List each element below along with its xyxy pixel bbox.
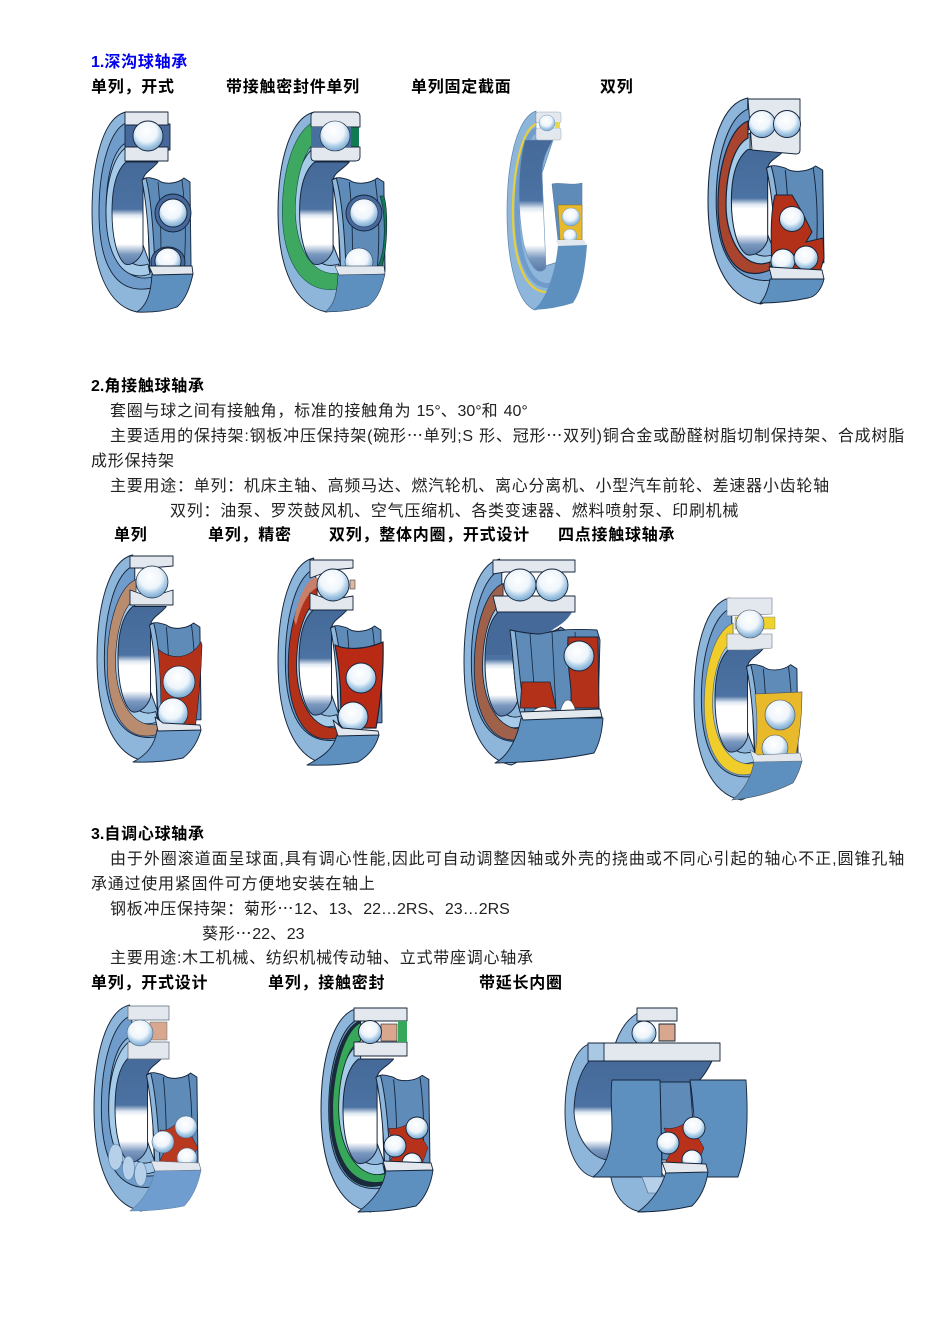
text block: section 2 description: 双列：油泵、罗茨鼓风机、空气压缩机、各类变速器、燃料喷射泵、印刷机械 [170,502,739,520]
text block: section 2 description [91,402,905,520]
text block: section 3 description: 主要用途:木工机械、纺织机械传动轴、立式带座调心轴承 [110,949,534,967]
icon: single row fixed section bearing [507,111,587,310]
subheading row: section 1 bearing types [91,77,633,96]
subheading row: section 3 bearing types: 单列，开式设计 [91,974,208,992]
title: section 2 angular contact ball bearings: 2.角接触球轴承 [91,376,205,395]
title: section 3 self-aligning ball bearings: 3.自调心球轴承 [91,824,205,843]
text block: section 3 description: 承通过使用紧固件可方便地安装在轴上 [91,875,376,893]
title: section 1 deep groove ball bearings: 1.深沟球轴承 [91,52,188,71]
icon: angular contact double row [464,559,603,765]
text block: section 2 description: 成形保持架 [91,452,175,470]
icon: single row open bearing [92,112,193,312]
text block: section 2 description: 主要用途：单列：机床主轴、高频马达、燃汽轮机、离心分离机、小型汽车前轮、差速器小齿轮轴 [110,477,830,495]
icon: self-aligning with extended inner ring [565,1008,747,1212]
subheading row: section 2 bearing types [114,525,675,544]
icon: four point contact bearing [694,598,802,800]
subheading row: section 1 bearing types: 带接触密封件单列 [226,77,360,96]
subheading row: section 1 bearing types: 单列固定截面 [411,77,511,96]
icon: self-aligning contact seal bearing [321,1008,433,1212]
subheading row: section 3 bearing types: 带延长内圈 [479,974,563,992]
text block: section 3 description: 钢板冲压保持架：菊形⋯12、13、22…2RS、23…2RS [110,900,510,918]
text block: section 3 description: 葵形⋯22、23 [202,925,305,943]
icon: self-aligning open bearing [94,1005,201,1211]
text block: section 3 description: 由于外圈滚道面呈球面,具有调心性能,因此可自动调整因轴或外壳的挠曲或不同心引起的轴心不正,圆锥孔轴 [110,850,905,868]
icon: angular contact single row precision [278,558,383,765]
subheading row: section 2 bearing types: 四点接触球轴承 [558,525,675,544]
icon: double row bearing [708,98,824,304]
subheading row: section 2 bearing types: 单列 [114,526,147,544]
subheading row: section 2 bearing types: 单列，精密 [208,525,292,544]
subheading row: section 2 bearing types: 双列，整体内圈，开式设计 [329,526,530,544]
icon: angular contact single row [97,555,202,762]
subheading row: section 3 bearing types: 单列，接触密封 [268,973,385,992]
text block: section 2 description: 主要适用的保持架:钢板冲压保持架(碗形⋯单列;S 形、冠形⋯双列)铜合金或酚醛树脂切制保持架、合成树脂 [110,427,905,445]
text block: section 2 description: 套圈与球之间有接触角，标准的接触角为 15°、30°和 40° [110,402,528,420]
icon: single row contact seal bearing [278,112,387,312]
subheading row: section 3 bearing types [91,973,563,992]
text block: section 3 description [91,850,905,967]
subheading row: section 1 bearing types: 双列 [600,78,633,96]
subheading row: section 1 bearing types: 单列，开式 [91,78,175,96]
